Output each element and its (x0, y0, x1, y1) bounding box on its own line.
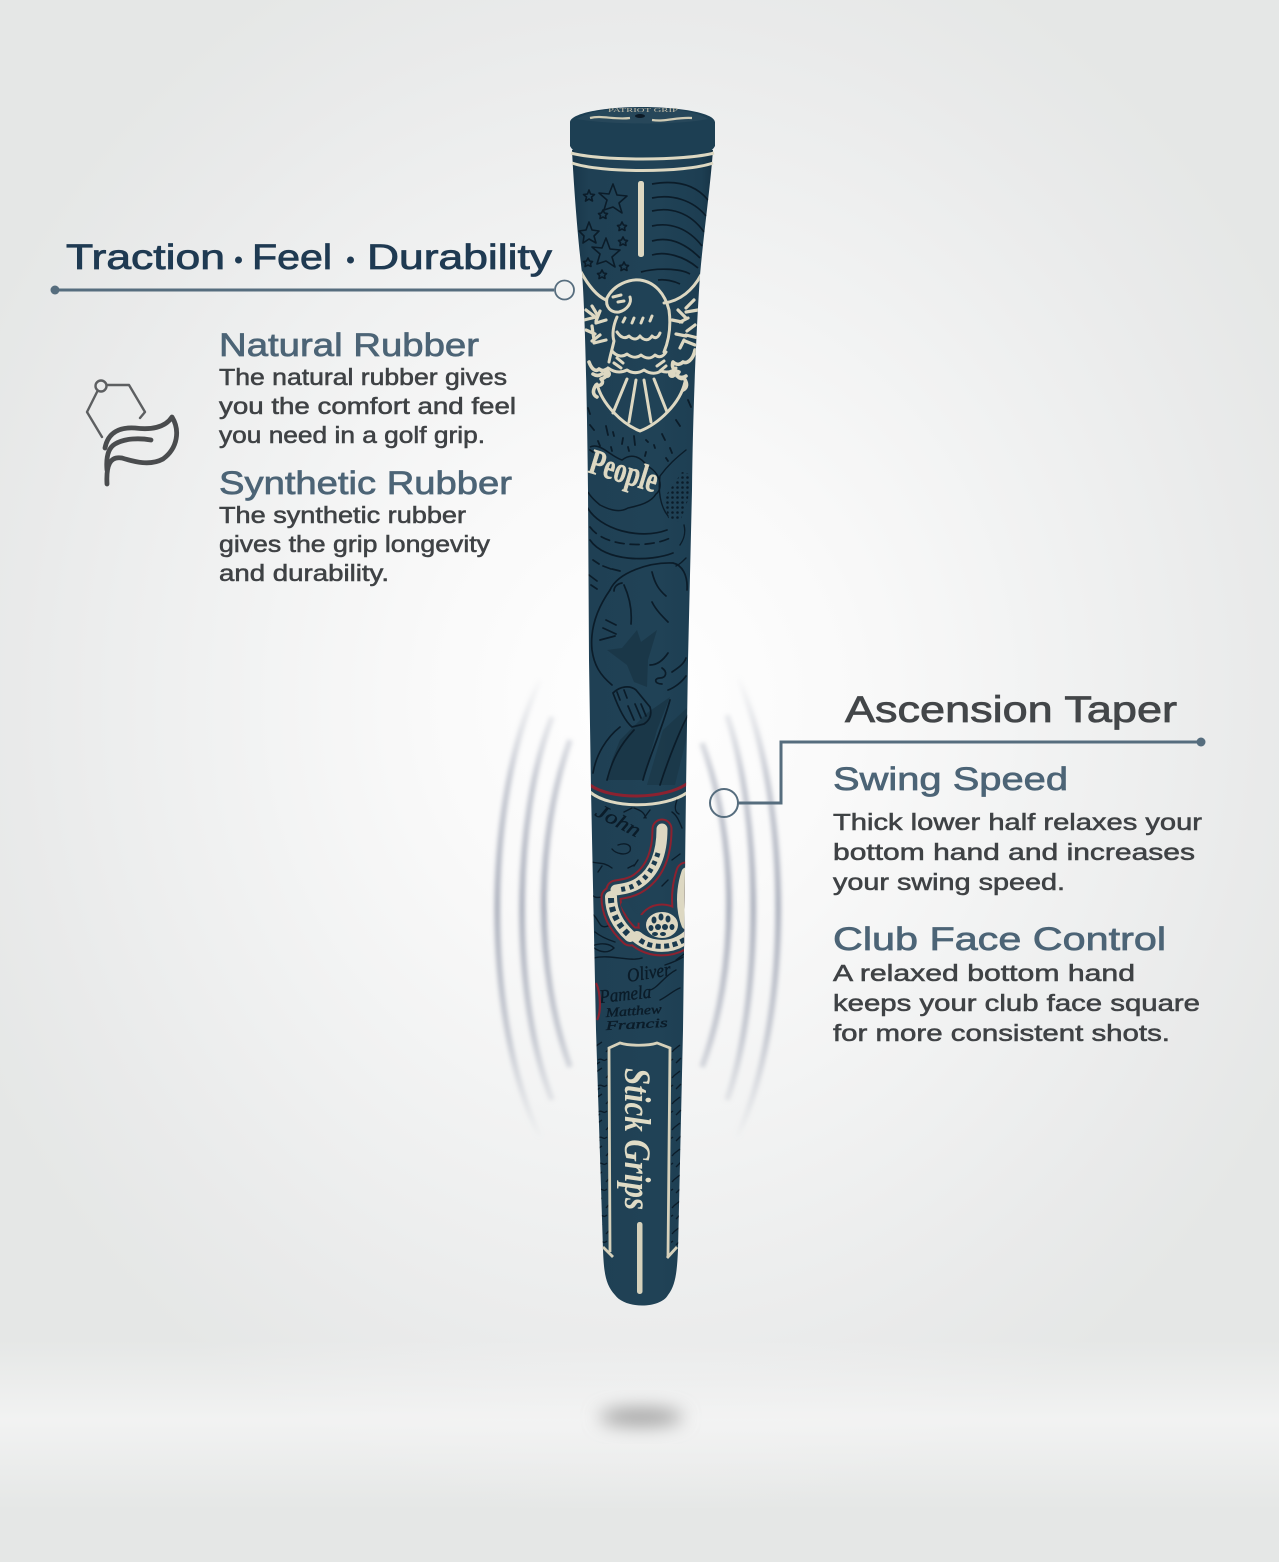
leader line (710, 738, 1206, 817)
dots and dashes under eagle (588, 400, 691, 461)
heading: Durability (367, 238, 553, 277)
text block: swing speed: your swing speed. (833, 869, 1065, 895)
signatures: Francis (604, 1015, 668, 1033)
text block: club face control: A relaxed bottom hand (833, 960, 1135, 986)
text block: natural rubber: you the comfort and feel (219, 393, 516, 419)
engraved shadow shapes (607, 630, 687, 785)
text block: natural rubber (219, 327, 516, 448)
text block: synthetic rubber: and durability. (219, 560, 389, 586)
signatures: Pamela (597, 982, 652, 1008)
grip body (572, 150, 713, 1306)
heading: Traction (66, 238, 225, 277)
text block: natural rubber: Natural Rubber (219, 327, 479, 363)
signatures: Oliver (625, 959, 673, 987)
collar stripes (571, 153, 714, 170)
golf grip (570, 107, 715, 1306)
People lettering (588, 445, 661, 512)
callout: traction feel durability (50, 238, 574, 300)
eagle (581, 272, 701, 431)
text block: synthetic rubber: The synthetic rubber (219, 502, 466, 528)
text block: swing speed: bottom hand and increases (833, 839, 1195, 865)
text block: club face control: keeps your club face square (833, 990, 1200, 1016)
leader line (50, 280, 574, 300)
Stick Grips label frame (603, 1043, 677, 1258)
signatures: John (592, 800, 644, 842)
heading (66, 238, 553, 277)
text block: club face control (833, 921, 1200, 1046)
text block: club face control: for more consistent shots. (833, 1020, 1170, 1046)
bottom bar (637, 1222, 642, 1294)
signatures (590, 800, 684, 1033)
text block: synthetic rubber (219, 465, 512, 586)
text block: natural rubber: The natural rubber gives (219, 364, 507, 390)
text block: natural rubber: you need in a golf grip. (219, 422, 485, 448)
icon: molecule and leaf (87, 380, 177, 484)
flag stars (579, 184, 628, 278)
signatures: Matthew (604, 1001, 662, 1020)
vibration arcs: left (497, 680, 570, 1137)
snake emblem (611, 829, 688, 946)
callout: ascension taper (710, 689, 1206, 817)
text block: club face control: Club Face Control (833, 921, 1166, 957)
Stick Grips logotype: Stick Grips (616, 1068, 657, 1210)
side signature texture (596, 1040, 684, 1245)
flag center bar (638, 181, 644, 257)
textured panel right of People (664, 472, 690, 522)
flag stripes (641, 183, 708, 284)
text block: synthetic rubber: gives the grip longevity (219, 531, 491, 557)
heading: Feel (252, 238, 332, 277)
People lettering: People (585, 441, 663, 500)
red accent at lower left (596, 983, 600, 1020)
heading: Ascension Taper (845, 689, 1177, 730)
engraved figure and lines (587, 450, 688, 785)
text block: synthetic rubber: Synthetic Rubber (219, 465, 512, 501)
grip cap: PATRIOT GRIP (608, 108, 679, 114)
floor shadow (599, 1408, 683, 1426)
text block: swing speed (833, 761, 1202, 895)
text block: swing speed: Swing Speed (833, 761, 1068, 797)
red and cream band (590, 783, 688, 805)
grip cap (570, 107, 715, 158)
text block: swing speed: Thick lower half relaxes your (833, 809, 1202, 835)
vibration arcs: right (702, 675, 778, 1137)
